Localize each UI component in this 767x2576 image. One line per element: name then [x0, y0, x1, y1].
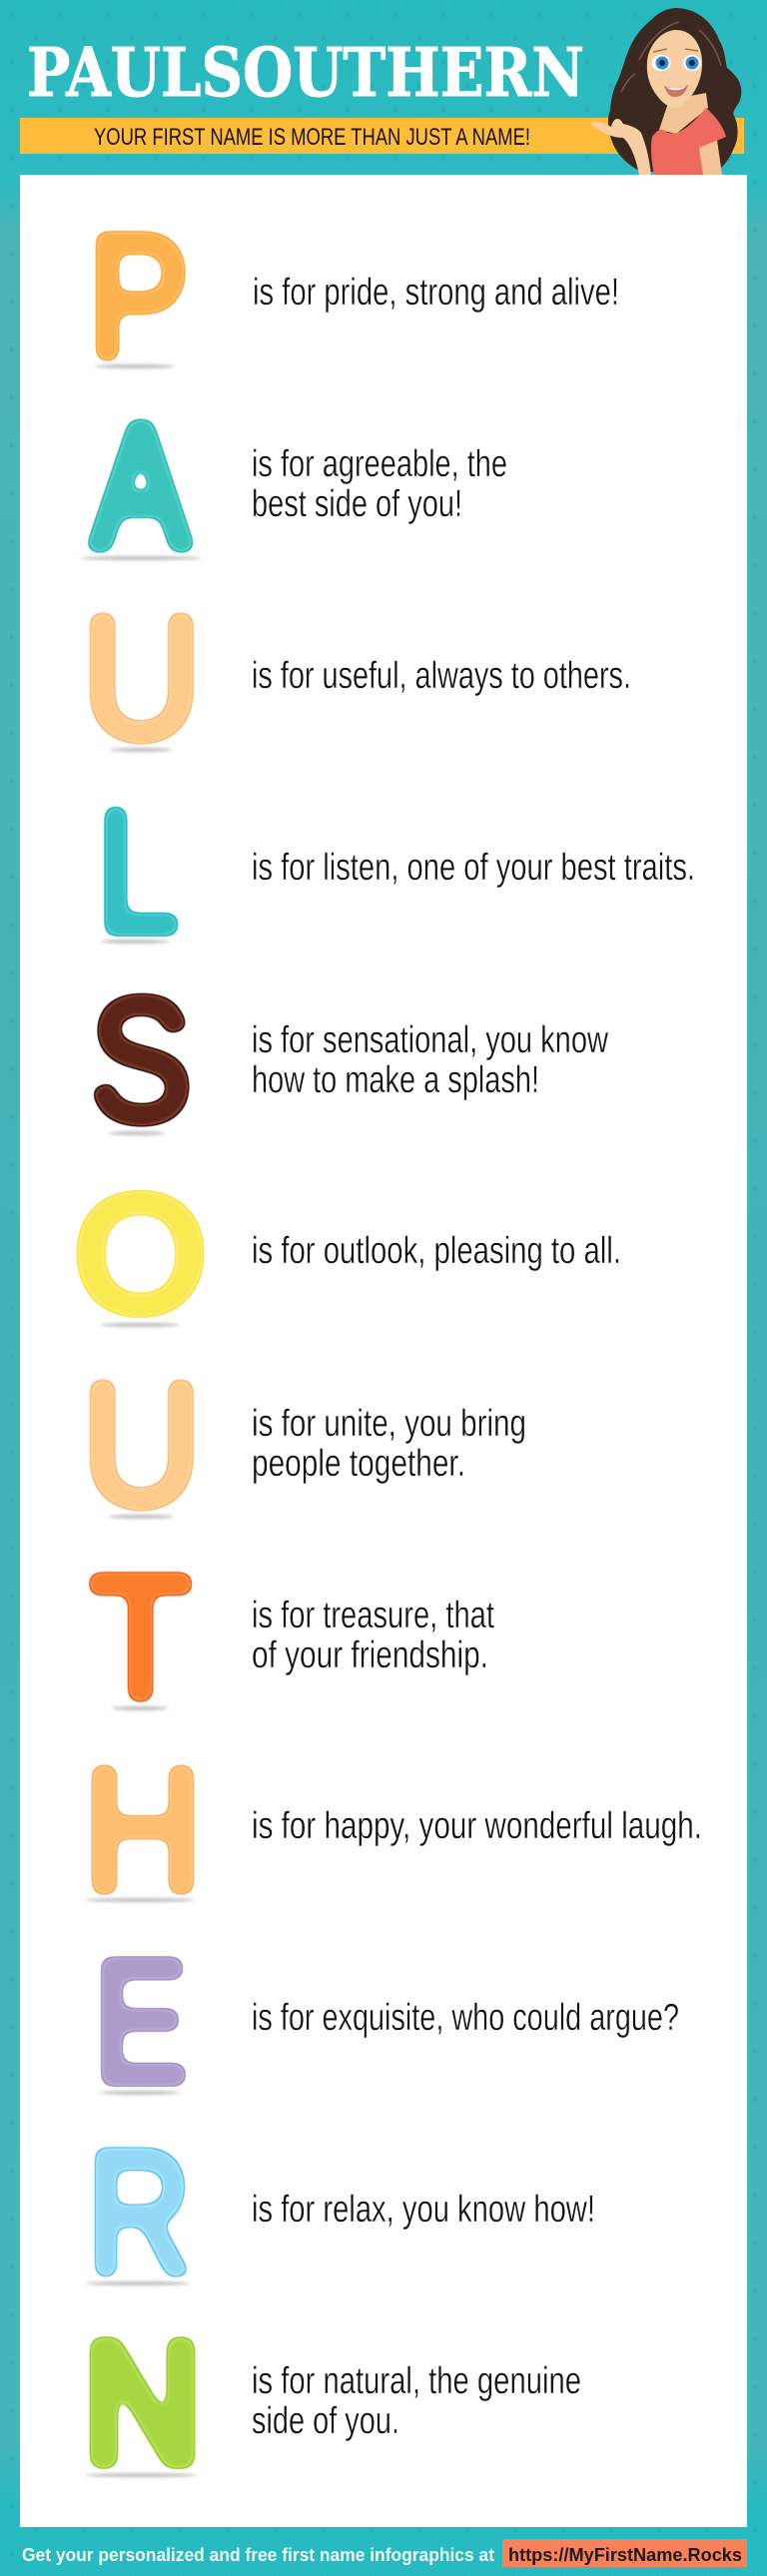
- row: N: [84, 2308, 581, 2498]
- letter shadow: [100, 940, 170, 944]
- letter shadow: [86, 2281, 190, 2285]
- letter S: S: [90, 963, 192, 1156]
- row: T: [90, 1540, 494, 1733]
- letter A: A: [92, 387, 189, 583]
- text: agreeable: [252, 443, 507, 525]
- letter E: E: [94, 1923, 188, 2119]
- letter shadow: [95, 364, 175, 368]
- row: S: [90, 963, 608, 1156]
- letter shadow: [108, 1515, 174, 1519]
- text: outlook: is for outlook, pleasing to all.: [252, 1230, 621, 1272]
- subtitle banner: [20, 118, 744, 154]
- footer url badge: https://MyFirstName.Rocks: [508, 2545, 742, 2565]
- hand and left arm: [590, 119, 651, 175]
- letter shadow: [85, 1898, 195, 1902]
- letter shadow: [112, 1706, 168, 1710]
- letter O: O: [75, 1162, 206, 1345]
- face: [647, 30, 702, 108]
- row: U: [82, 579, 631, 775]
- title: PAULSOUTHERN: [27, 33, 584, 112]
- text: useful: is for useful, always to others.: [252, 655, 631, 697]
- row: U second: [82, 1346, 526, 1542]
- row: R: [86, 2115, 595, 2308]
- row: P: [88, 198, 619, 393]
- letter R: R: [88, 2115, 192, 2308]
- letter shadow: [80, 556, 202, 560]
- text: unite: people together.: [252, 1443, 465, 1485]
- letter P: P: [88, 198, 189, 393]
- text: unite: [252, 1403, 526, 1485]
- letter N: N: [84, 2308, 201, 2498]
- letter shadow: [110, 748, 172, 752]
- letter H: H: [83, 1731, 203, 1927]
- letter U: U: [82, 1346, 201, 1542]
- shirt: [651, 108, 726, 175]
- row: L: [97, 773, 695, 968]
- text: natural: is for natural, the genuine: [252, 2360, 581, 2402]
- text: treasure: is for treasure, that: [252, 1595, 494, 1636]
- letter U: U: [82, 579, 201, 775]
- text: natural: [252, 2360, 581, 2442]
- text: treasure: of your friendship.: [252, 1634, 488, 1676]
- skin: neck and right arm: [659, 93, 722, 175]
- text: pride: is for pride, strong and alive!: [253, 272, 619, 314]
- text: sensational: how to make a splash!: [252, 1059, 539, 1101]
- row: A: [80, 387, 507, 583]
- letter shadow: [100, 2091, 180, 2095]
- text: sensational: [252, 1019, 608, 1101]
- letter T: T: [90, 1540, 191, 1733]
- footer call to action: Get your personalized and free first name infographics at: [22, 2545, 494, 2565]
- letter L: L: [97, 773, 179, 968]
- text: treasure: [252, 1595, 494, 1676]
- row: E: [94, 1923, 679, 2119]
- row: H: [83, 1731, 702, 1927]
- eyes: [651, 49, 701, 71]
- text: relax: is for relax, you know how!: [252, 2189, 595, 2231]
- letter shadow: [100, 1323, 180, 1327]
- text: unite: is for unite, you bring: [252, 1403, 526, 1445]
- row: O: [75, 1162, 621, 1345]
- mouth: [664, 85, 688, 97]
- letter shadow: [109, 1131, 165, 1135]
- subtitle text: YOUR FIRST NAME IS MORE THAN JUST A NAME!: [94, 124, 530, 151]
- footer url badge: [502, 2539, 747, 2567]
- letter shadow: [85, 2473, 197, 2477]
- text: agreeable: best side of you!: [252, 483, 462, 525]
- text: natural: side of you.: [252, 2400, 399, 2442]
- illustration: woman presenting: [590, 8, 741, 175]
- text: sensational: is for sensational, you know: [252, 1019, 608, 1061]
- text: agreeable: is for agreeable, the: [252, 443, 507, 485]
